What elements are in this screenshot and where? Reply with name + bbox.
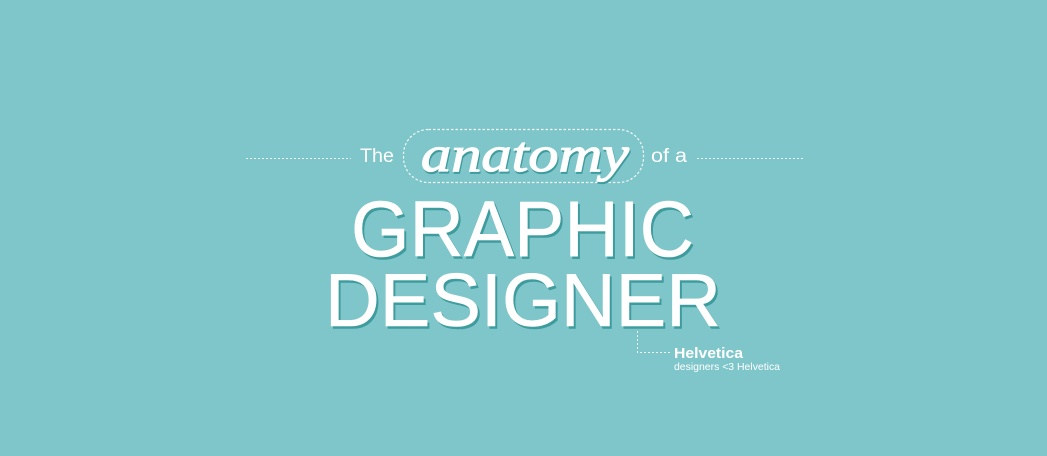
- heading: GRAPHIC: GRAPHIC: [353, 186, 696, 276]
- callout: Helvetica note: [674, 345, 780, 373]
- heading: DESIGNER: DESIGNER: [325, 258, 721, 342]
- heading: GRAPHIC: GRAPHIC: [351, 184, 694, 273]
- words: of a: of a: [651, 146, 687, 167]
- word: The: The: [360, 146, 394, 167]
- callout leader line: [638, 331, 671, 352]
- script word: anatomy: anatomy: [421, 126, 630, 182]
- heading: DESIGNER: DESIGNER: [327, 260, 723, 344]
- script word: anatomy: anatomy: [422, 128, 631, 184]
- callout: Helvetica note: Helvetica: [674, 345, 744, 362]
- callout: Helvetica note: designers <3 Helvetica: [674, 361, 780, 373]
- dashed rounded badge: [404, 130, 644, 182]
